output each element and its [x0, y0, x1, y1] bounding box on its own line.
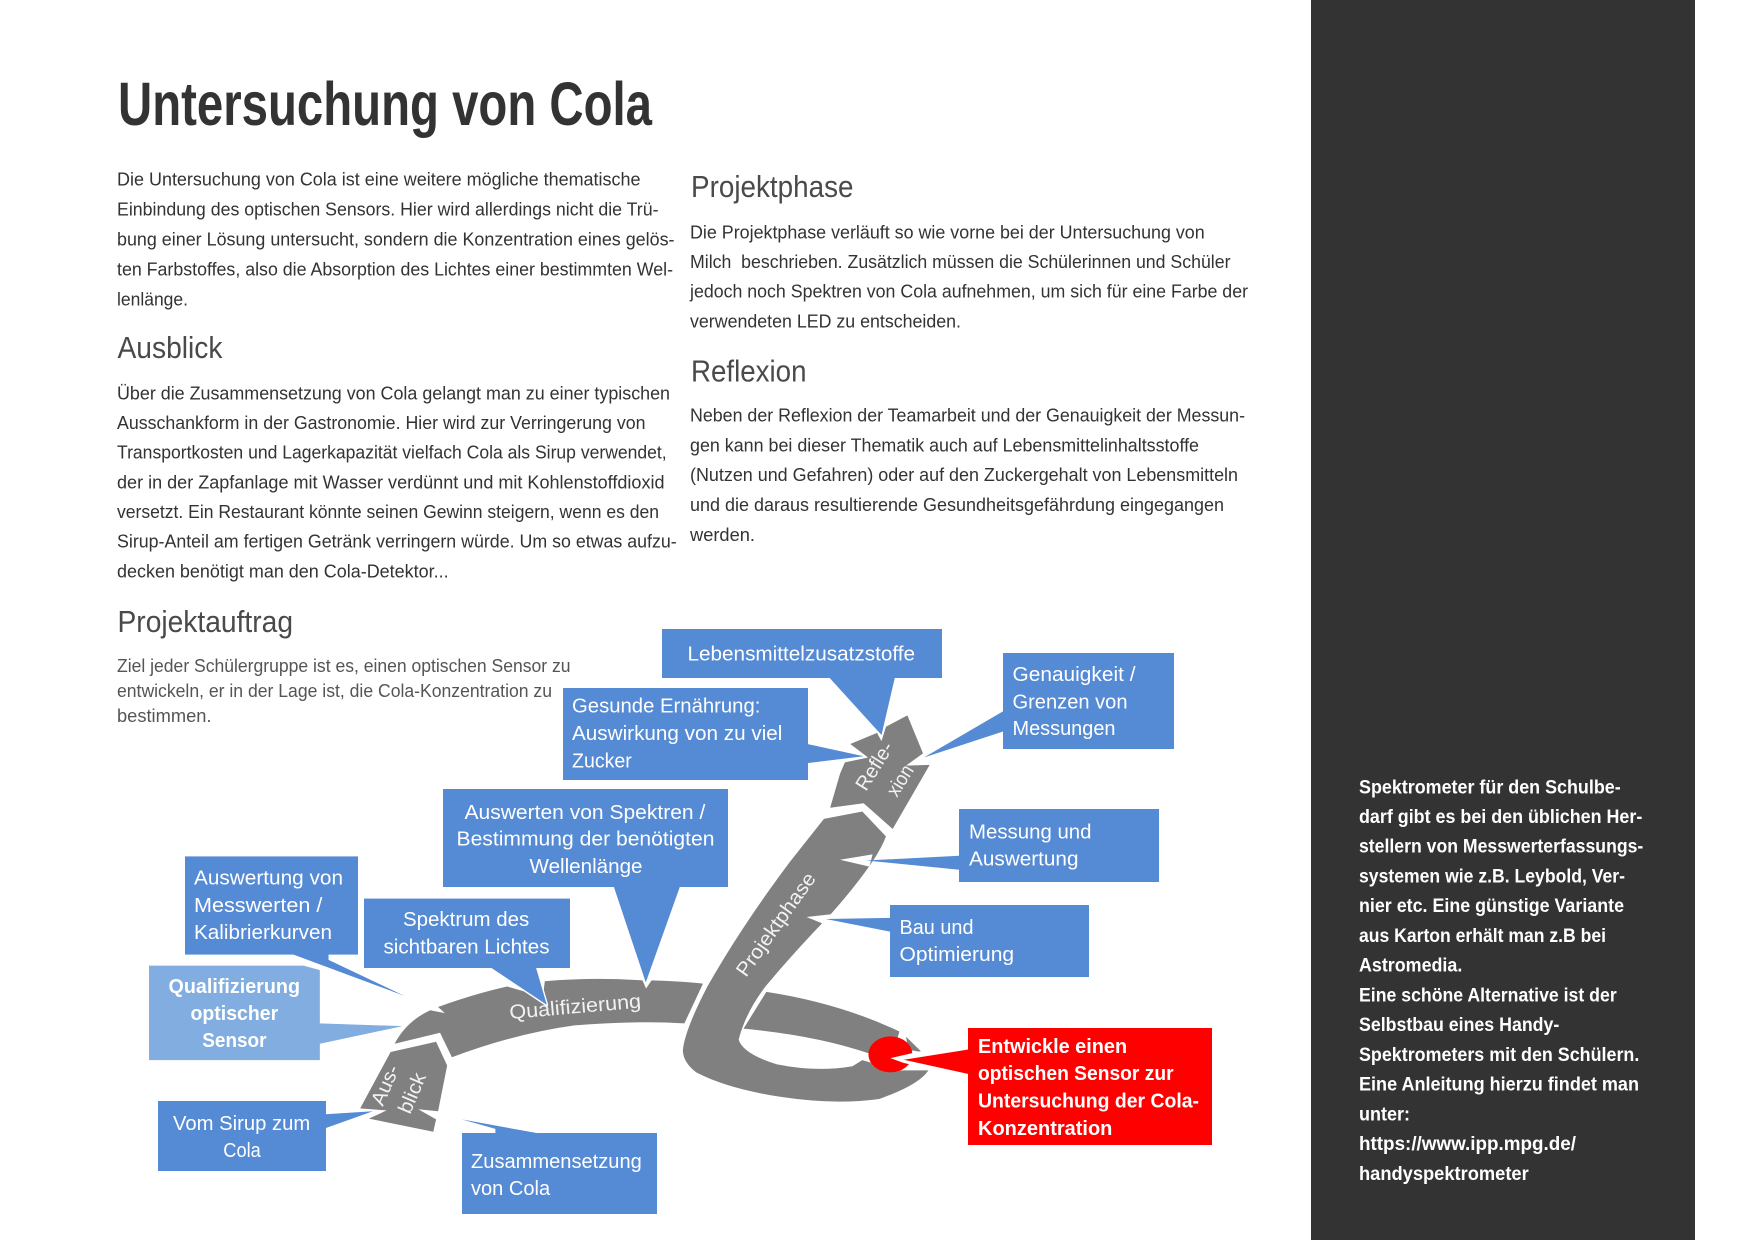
sidebar text: Selbstbau eines Handy- — [1359, 1015, 1559, 1036]
callout: Entwickle einen optischen Sensor: Konzentration — [978, 1118, 1112, 1140]
callout: Spektrum des sichtbaren Lichtes: Spektrum des — [403, 909, 529, 931]
text block: Ausblick: Sirup-Anteil am fertigen Getränk verringern würde. Um so etwas aufzu- — [117, 531, 677, 552]
text block: Projektauftrag: bestimmen. — [117, 706, 212, 726]
callout: Qualifizierung optischer Sensor: Sensor — [202, 1030, 267, 1052]
callout: Bau und Optimierung — [807, 905, 1089, 977]
start marker: red dot — [868, 1036, 912, 1072]
callout: Genauigkeit / Grenzen von Messungen: Grenzen von — [1012, 692, 1128, 714]
callout: Bau und Optimierung: Optimierung — [900, 944, 1014, 966]
text block: Ausblick — [117, 382, 677, 581]
sidebar text: Eine Anleitung hierzu findet man — [1359, 1075, 1639, 1096]
text block: Projektphase: jedoch noch Spektren von Cola aufnehmen, um sich für eine Farbe der — [689, 281, 1248, 302]
sidebar text: nier etc. Eine günstige Variante — [1359, 896, 1624, 917]
callout: Genauigkeit / Grenzen von Messungen — [924, 653, 1174, 757]
callout: Vom Sirup zum Cola: Cola — [223, 1140, 262, 1162]
callout: Entwickle einen optischen Sensor — [890, 1028, 1212, 1145]
callout: Entwickle einen optischen Sensor: Untersuchung der Cola- — [978, 1090, 1199, 1112]
diagram: project path — [360, 715, 930, 1132]
text block: Reflexion — [689, 405, 1245, 545]
callout: Zusammensetzung von Cola: Zusammensetzung — [471, 1151, 642, 1173]
callout: Auswerten von Spektren: Auswerten von Spektren / — [464, 802, 706, 824]
text block: Reflexion: gen kann bei dieser Thematik auch auf Lebensmittelinhaltsstoffe — [690, 434, 1199, 456]
callout: Messung und Auswertung: Auswertung — [969, 849, 1078, 871]
path segment: Projektphase — [683, 811, 928, 1102]
text block: introduction — [117, 169, 674, 310]
path segment: Qualifizierung — [395, 979, 703, 1057]
heading: Ausblick: Ausblick — [118, 330, 223, 365]
callout: Qualifizierung optischer Sensor: Qualifizierung — [168, 976, 300, 998]
callout: Gesunde Ernährung: Zucker — [572, 750, 632, 772]
text block: Projektphase — [689, 221, 1248, 332]
callout: Gesunde Ernährung — [563, 688, 864, 780]
callout: Qualifizierung optischer Sensor: optischer — [190, 1003, 278, 1025]
callout: Vom Sirup zum Cola: Vom Sirup zum — [173, 1113, 310, 1135]
path segment: Ausblick: blick — [394, 1069, 431, 1117]
text block: Reflexion: und die daraus resultierende Gesundheitsgefährdung eingegangen — [690, 494, 1224, 515]
callout: Qualifizierung optischer Sensor — [149, 966, 402, 1060]
path segment: Reflexion: Refle- — [852, 738, 898, 795]
text block: Reflexion: werden. — [689, 524, 755, 545]
path segment: Projektphase: Projektphase — [732, 869, 821, 981]
sidebar text: Astromedia. — [1359, 956, 1462, 977]
callout: Bau und Optimierung: Bau und — [900, 917, 974, 939]
callout: Lebensmittelzusatzstoffe — [662, 629, 942, 735]
sidebar text: Spektrometers mit den Schülern. — [1359, 1045, 1639, 1066]
callout: Vom Sirup zum Cola — [158, 1101, 373, 1171]
callout: Auswertung von Messwerten: Messwerten / — [194, 895, 323, 917]
text block: Ausblick: Ausschankform in der Gastronomie. Hier wird zur Verringerung von — [117, 412, 646, 433]
path segment: Reflexion: xion — [883, 761, 919, 801]
callout: Auswertung von Messwerten: Kalibrierkurven — [194, 922, 332, 944]
text block: Projektphase: Die Projektphase verläuft so wie vorne bei der Untersuchung von — [690, 221, 1205, 242]
title: Untersuchung von Cola — [118, 70, 653, 138]
callout: Zusammensetzung von Cola: von Cola — [471, 1178, 551, 1200]
callout: Spektrum des sichtbaren Lichtes: sichtbaren Lichtes — [384, 937, 550, 959]
text block: Ausblick: Über die Zusammensetzung von Cola gelangt man zu einer typischen — [117, 382, 670, 403]
text block: Reflexion: (Nutzen und Gefahren) oder auf den Zuckergehalt von Lebensmitteln — [690, 464, 1238, 485]
heading: Projektauftrag: Projektauftrag — [118, 604, 293, 639]
sidebar panel — [1311, 0, 1695, 1240]
callout: Genauigkeit / Grenzen von Messungen: Messungen — [1012, 718, 1116, 740]
callout: Lebensmittelzusatzstoffe: Lebensmittelzusatzstoffe — [688, 644, 915, 666]
callout: Auswerten von Spektren: Wellenlänge — [530, 856, 642, 878]
text block: Ausblick: versetzt. Ein Restaurant könnte seinen Gewinn steigern, wenn es den — [117, 501, 659, 522]
text block: Ausblick: decken benötigt man den Cola-Detektor... — [117, 560, 449, 581]
sidebar text: systemen wie z.B. Leybold, Ver- — [1359, 866, 1625, 888]
heading: Reflexion: Reflexion — [691, 354, 806, 388]
text block: introduction: bung einer Lösung untersucht, sondern die Konzentration eines gelös- — [117, 229, 674, 250]
callout: Zusammensetzung von Cola — [462, 1119, 657, 1214]
text block: Projektphase: Milch beschrieben. Zusätzlich müssen die Schülerinnen und Schüler — [690, 251, 1230, 272]
callout: Auswerten von Spektren: Bestimmung der benötigten — [456, 829, 714, 851]
callout: Auswertung von Messwerten — [185, 856, 404, 996]
callout: Entwickle einen optischen Sensor: Entwickle einen — [978, 1036, 1127, 1058]
text block: Projektauftrag: Ziel jeder Schülergruppe ist es, einen optischen Sensor zu — [117, 656, 570, 676]
callout: Messung und Auswertung: Messung und — [969, 822, 1092, 844]
text block: Projektauftrag — [117, 656, 570, 726]
text block: Ausblick: der in der Zapfanlage mit Wasser verdünnt und mit Kohlenstoffdioxid — [117, 471, 664, 492]
heading: Projektphase: Projektphase — [691, 169, 854, 204]
path segment: Reflexion — [830, 715, 930, 829]
callout: Auswerten von Spektren — [443, 789, 728, 982]
path segment: Qualifizierung: Qualifizierung — [509, 991, 642, 1024]
sidebar text: darf gibt es bei den üblichen Her- — [1359, 807, 1642, 828]
sidebar text: unter: — [1359, 1104, 1410, 1125]
sidebar text — [1359, 777, 1643, 1185]
callout: Gesunde Ernährung: Gesunde Ernährung: — [572, 696, 760, 718]
callout: Genauigkeit / Grenzen von Messungen: Genauigkeit / — [1012, 664, 1136, 686]
sidebar text: handyspektrometer — [1359, 1164, 1529, 1185]
callout: Auswertung von Messwerten: Auswertung von — [194, 868, 343, 890]
path segment: start — [744, 992, 922, 1053]
path segment: Ausblick — [360, 1042, 447, 1132]
sidebar text: Spektrometer für den Schulbe- — [1359, 777, 1621, 798]
callout: Gesunde Ernährung: Auswirkung von zu viel — [572, 723, 782, 745]
text block: Projektphase: verwendeten LED zu entscheiden. — [690, 310, 961, 332]
callout: Messung und Auswertung — [840, 809, 1159, 882]
text block: Projektauftrag: entwickeln, er in der Lage ist, die Cola-Konzentration zu — [117, 681, 552, 701]
text block: introduction: lenlänge. — [117, 289, 188, 310]
text block: Reflexion: Neben der Reflexion der Teamarbeit und der Genauigkeit der Messun- — [690, 405, 1245, 426]
sidebar text: https://www.ipp.mpg.de/ — [1359, 1134, 1577, 1155]
sidebar text: aus Karton erhält man z.B bei — [1359, 926, 1606, 947]
callout: Spektrum des sichtbaren Lichtes — [364, 899, 570, 1005]
text block: Ausblick: Transportkosten und Lagerkapazität vielfach Cola als Sirup verwendet, — [117, 442, 667, 463]
text block: introduction: ten Farbstoffes, also die Absorption des Lichtes einer bestimmten Wel- — [117, 259, 673, 280]
sidebar text: Eine schöne Alternative ist der — [1359, 985, 1617, 1006]
text block: introduction: Die Untersuchung von Cola ist eine weitere mögliche thematische — [117, 169, 640, 190]
text block: introduction: Einbindung des optischen Sensors. Hier wird allerdings nicht die Trü- — [117, 199, 658, 220]
callout: Entwickle einen optischen Sensor: optischen Sensor zur — [978, 1063, 1174, 1085]
path segment: Ausblick: Aus- — [367, 1062, 404, 1109]
sidebar text: stellern von Messwerterfassungs- — [1359, 837, 1643, 858]
